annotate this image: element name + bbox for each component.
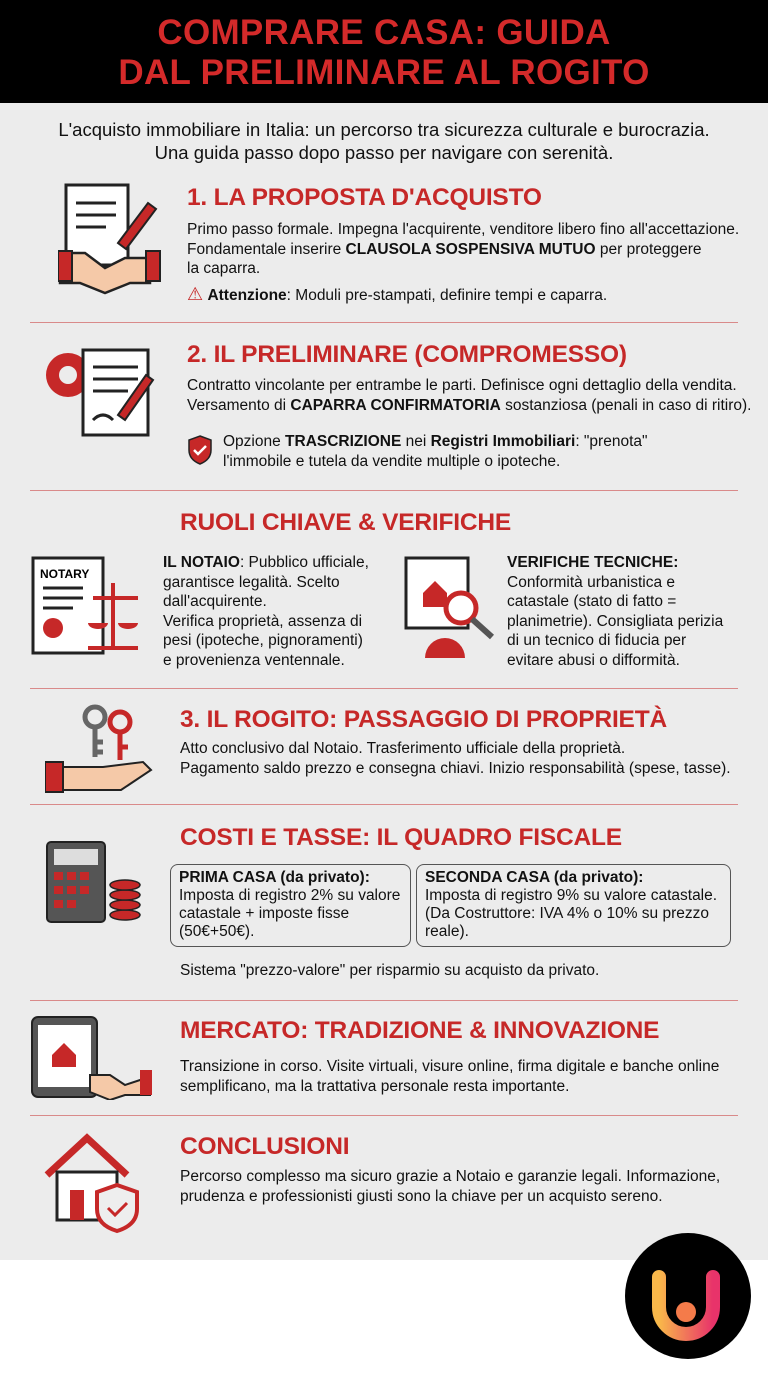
text: verifiche: evitare abusi o difformità. [507, 652, 680, 668]
heading: step 1: 1. LA PROPOSTA D'ACQUISTO [187, 184, 542, 211]
text: verifiche: planimetrie). Consigliata perizia [507, 612, 723, 630]
text: conclusioni [180, 1168, 720, 1204]
text: verifiche: catastale (stato di fatto = [507, 593, 676, 610]
text: notaio: pesi (ipoteche, pignoramenti) [163, 632, 363, 649]
text: notaio: garantisce legalità. Scelto [163, 574, 340, 590]
text: conclusioni: Percorso complesso ma sicuro grazie a Notaio e garanzie legali. Informazione, [180, 1168, 720, 1185]
title: DAL PRELIMINARE AL ROGITO [118, 53, 650, 92]
icon: notary: NOTARY [40, 567, 89, 581]
icon: calculator coins [46, 841, 141, 923]
text: mercato [180, 1058, 719, 1094]
heading: conclusioni: CONCLUSIONI [180, 1133, 349, 1160]
box: seconda casa: (Da Costruttore: IVA 4% o 10% su prezzo [425, 905, 709, 922]
text: prezzo-valore: Sistema "prezzo-valore" per risparmio su acquisto da privato. [180, 962, 599, 979]
box: prima casa [170, 864, 411, 947]
text: step 2: Contratto vincolante per entrambe le parti. Definisce ogni dettaglio della vendita. [187, 377, 737, 394]
box: prima casa: Imposta di registro 2% su valore [179, 887, 400, 904]
heading: ruoli: RUOLI CHIAVE & VERIFICHE [180, 509, 511, 536]
subtitle [58, 119, 710, 163]
text: verifiche: Conformità urbanistica e [507, 574, 675, 590]
box: prima casa: catastale + imposte fisse [179, 905, 349, 922]
text: verifiche: VERIFICHE TECNICHE: [507, 554, 678, 571]
logo [625, 1233, 751, 1359]
box: prima casa: PRIMA CASA (da privato): [179, 869, 370, 886]
text: notaio: Verifica proprietà, assenza di [163, 612, 362, 630]
subtitle: L'acquisto immobiliare in Italia: un percorso tra sicurezza culturale e burocrazia. [58, 119, 710, 140]
text: step 3 [180, 740, 731, 776]
icon: house shield [44, 1133, 139, 1234]
icon: contract handshake [58, 184, 161, 294]
text: step 3: Atto conclusivo dal Notaio. Trasferimento ufficiale della proprietà. [180, 740, 625, 757]
text: step 2 [187, 377, 752, 414]
subtitle: Una guida passo dopo passo per navigare con serenità. [155, 142, 613, 163]
text: notaio: e provenienza ventennale. [163, 652, 345, 668]
box: seconda casa: Imposta di registro 9% su valore catastale. [425, 887, 717, 904]
icon: shield [188, 435, 212, 465]
box: prima casa: (50€+50€). [179, 923, 254, 940]
icon: notary [32, 556, 138, 654]
box: seconda casa: reale). [425, 923, 469, 940]
text: mercato: Transizione in corso. Visite virtuali, visure online, firma digitale e banche online [180, 1058, 719, 1075]
text: step 1: Primo passo formale. Impegna l'acquirente, venditore libero fino all'accettazione. [187, 221, 739, 238]
text: step 2: Versamento di CAPARRA CONFIRMATORIA sostanziosa (penali in caso di ritiro). [187, 396, 752, 414]
callout: warning: ⚠ Attenzione: Moduli pre-stampati, definire tempi e caparra. [187, 284, 607, 304]
title: COMPRARE CASA: GUIDA [157, 13, 611, 52]
box: seconda casa: SECONDA CASA (da privato): [425, 869, 643, 886]
text: verifiche [507, 554, 724, 668]
callout: trascrizione: l'immobile e tutela da vendite multiple o ipoteche. [223, 452, 560, 470]
icon: gear document [46, 348, 154, 436]
heading: costi: COSTI E TASSE: IL QUADRO FISCALE [180, 824, 622, 851]
callout: trascrizione [188, 433, 648, 470]
text: verifiche: di un tecnico di fiducia per [507, 632, 686, 649]
text: notaio: IL NOTAIO: Pubblico ufficiale, [163, 554, 369, 571]
title [0, 0, 768, 103]
icon: blueprint magnifier [404, 556, 494, 658]
box: seconda casa [416, 864, 731, 947]
text: step 1 [187, 221, 739, 277]
callout: trascrizione: Opzione TRASCRIZIONE nei Registri Immobiliari: "prenota" [223, 433, 648, 450]
icon: tablet handshake [31, 1016, 152, 1100]
text: step 1: la caparra. [187, 260, 260, 277]
text: notaio: dall'acquirente. [163, 593, 267, 610]
heading: mercato: MERCATO: TRADIZIONE & INNOVAZIONE [180, 1017, 659, 1044]
icon: keys hand [45, 704, 152, 793]
heading: step 3: 3. IL ROGITO: PASSAGGIO DI PROPRIETÀ [180, 706, 667, 733]
text: step 3: Pagamento saldo prezzo e consegna chiavi. Inizio responsabilità (spese, tasse). [180, 760, 731, 776]
text: mercato: semplificano, ma la trattativa personale resta importante. [180, 1078, 569, 1094]
text: notaio [163, 554, 369, 668]
heading: step 2: 2. IL PRELIMINARE (COMPROMESSO) [187, 341, 627, 368]
text: step 1: Fondamentale inserire CLAUSOLA SOSPENSIVA MUTUO per proteggere [187, 240, 702, 258]
text: conclusioni: prudenza e professionisti giusti sono la chiave per un acquisto sereno. [180, 1188, 663, 1204]
